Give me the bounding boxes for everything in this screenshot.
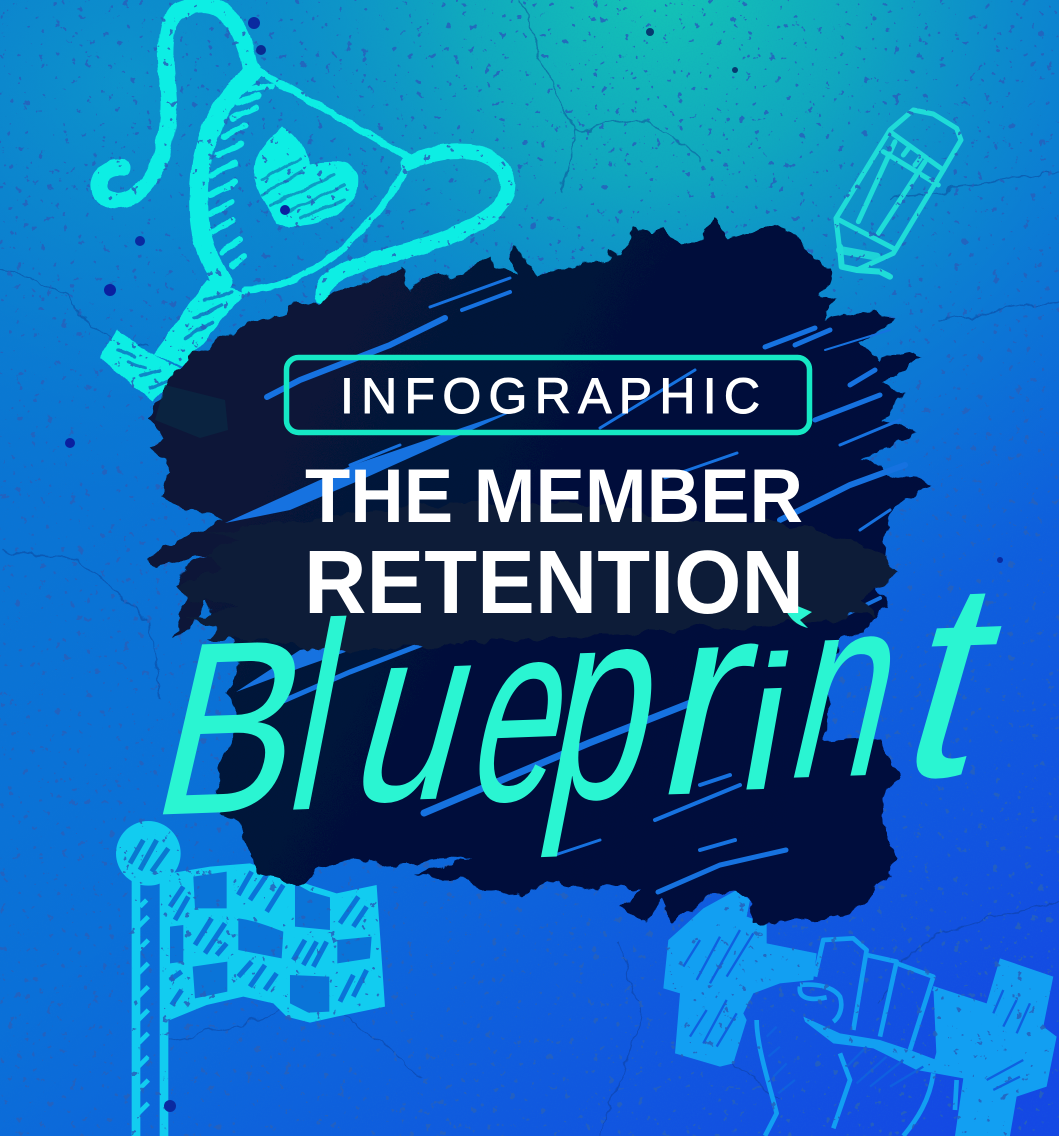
badge: infographic label (286, 358, 810, 432)
script word: Blueprint: t (873, 521, 1037, 839)
script word: Blueprint: i (726, 616, 808, 831)
icon: checkered flag (116, 821, 385, 1136)
dumbbell and fist hatching (683, 930, 1030, 1093)
fingers (757, 938, 957, 1136)
brush detail: blue streaks across ink (225, 278, 905, 892)
script word: Blueprint (134, 521, 1037, 868)
flag dark squares (170, 872, 372, 1013)
icon: pencil (836, 110, 961, 277)
script word: Blueprint: l (270, 567, 368, 867)
brush detail: ghosted cup base on ink (155, 385, 228, 438)
title: the member retention: THE MEMBER (305, 454, 803, 539)
flag hatch squares (170, 872, 367, 1005)
script word: Blueprint: u (328, 571, 510, 856)
icon: fist gripping dumbbell (663, 890, 1057, 1136)
title: the member retention (304, 454, 804, 633)
teal tail behind title (783, 600, 812, 628)
right weight and bar (803, 958, 1057, 1136)
cup hatching (210, 86, 272, 266)
cup body left side (199, 72, 253, 282)
script word: Blueprint: B (134, 586, 334, 868)
badge: infographic label: INFOGRAPHIC (340, 368, 760, 424)
cup rim (257, 70, 410, 158)
script word: Blueprint: r (639, 542, 784, 854)
brush stroke: dark ink splash (147, 218, 932, 923)
brush detail: lighter horizontal band behind title (173, 502, 895, 655)
cup right handle (322, 152, 507, 296)
heart (254, 127, 358, 226)
cup right side (245, 167, 407, 290)
script word: Blueprint: e (449, 566, 602, 857)
left weight (663, 890, 817, 1067)
flag cloth (160, 863, 385, 1023)
flag pole (136, 880, 164, 1136)
flag ball (116, 821, 181, 886)
script word: Blueprint: n (769, 541, 930, 834)
script word: Blueprint: p (528, 547, 689, 860)
trophy stem and base (100, 280, 245, 402)
title: the member retention: RETENTION (304, 533, 804, 633)
icon: trophy cup with heart (98, 5, 507, 402)
cup left handle (98, 5, 250, 200)
